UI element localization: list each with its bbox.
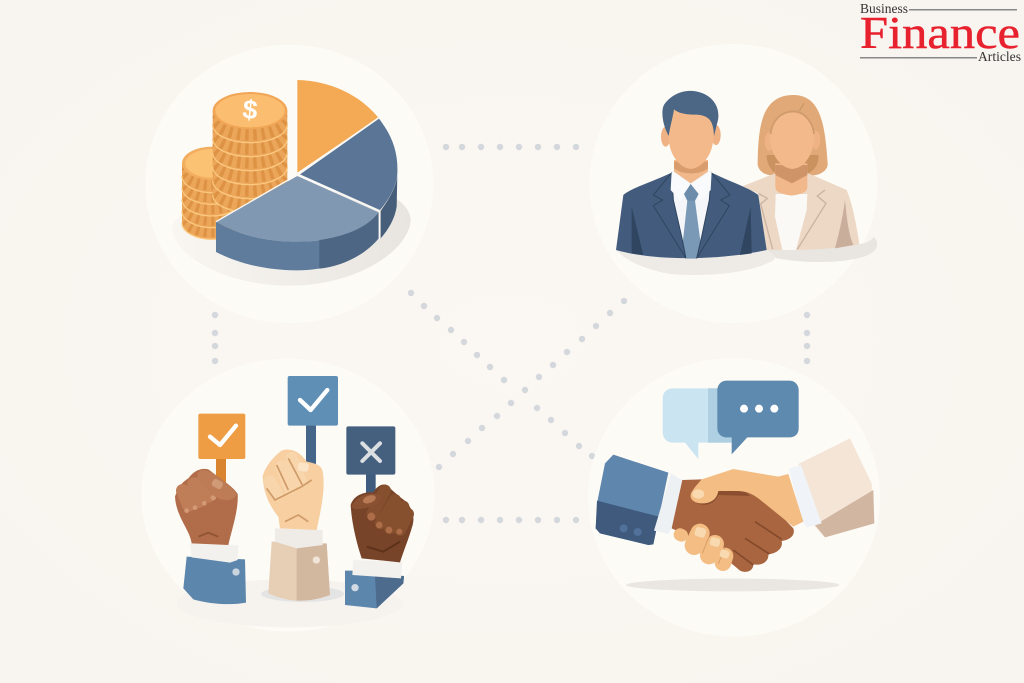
thumb nail	[692, 489, 704, 499]
board	[288, 376, 338, 426]
stick	[306, 423, 316, 467]
cuff	[352, 560, 402, 578]
infographic canvas	[175, 4, 1021, 608]
thumb nail	[211, 478, 224, 490]
pie shadow	[172, 187, 411, 286]
fingers	[270, 458, 301, 494]
finger nails	[694, 526, 730, 559]
right cuff	[789, 465, 822, 528]
board	[198, 414, 245, 459]
sleeve shade	[815, 490, 874, 537]
check mark	[300, 390, 327, 410]
right sleeve	[798, 438, 874, 537]
sleeve shade	[297, 543, 330, 601]
circle backdrop	[588, 358, 880, 637]
logo top rule	[909, 9, 1017, 10]
middle arm shadow	[261, 586, 344, 602]
pie side shade	[319, 212, 379, 269]
man right ear	[711, 125, 721, 145]
man tie	[683, 184, 701, 259]
button	[313, 556, 320, 564]
thumb	[352, 494, 381, 509]
logo word: Business: Business	[860, 2, 908, 17]
brown hand	[672, 479, 794, 572]
man shirt	[672, 172, 712, 258]
woman lapels	[758, 190, 826, 249]
panel: pie chart and coins	[145, 45, 433, 323]
woman	[742, 95, 859, 250]
woman sleeve shade	[835, 200, 853, 248]
stick	[216, 457, 226, 483]
panel: voting hands	[141, 358, 435, 632]
orange sign	[198, 414, 245, 483]
man shadow	[616, 250, 775, 275]
ground shadow	[177, 579, 403, 627]
finger gaps	[702, 537, 725, 564]
sleeve top	[596, 455, 668, 545]
man	[616, 91, 767, 259]
bubble body	[717, 381, 799, 454]
woman neck	[775, 163, 807, 196]
man tie knot	[684, 184, 699, 201]
typing dots	[740, 405, 778, 413]
dotted connectors	[212, 144, 810, 523]
check mark	[210, 426, 236, 445]
thumb	[197, 470, 237, 500]
board	[346, 426, 395, 475]
sleeve shade	[596, 501, 659, 545]
woman hairline	[771, 103, 814, 134]
woman face	[770, 113, 814, 169]
blue sign	[288, 376, 338, 467]
pie orange slice	[297, 80, 378, 173]
logo: Business Finance Articles	[860, 2, 1021, 64]
fingers	[372, 491, 408, 530]
thumb nail	[297, 462, 309, 472]
cuff	[190, 543, 238, 563]
tan fingers	[680, 533, 725, 563]
fingers	[183, 477, 208, 505]
thumb nail	[362, 494, 377, 505]
circle backdrop	[141, 358, 435, 632]
pie light slice	[216, 176, 379, 242]
cross mark	[362, 443, 380, 461]
panel: handshake	[588, 358, 880, 637]
woman shadow	[767, 237, 877, 262]
back coin stack	[182, 147, 242, 239]
man collar	[671, 172, 712, 202]
left sleeve	[596, 455, 668, 545]
woman top	[775, 194, 807, 250]
tan hand	[691, 469, 803, 527]
button	[351, 584, 359, 591]
sleeve top	[798, 438, 874, 537]
man face	[669, 107, 713, 169]
pie slice separators	[216, 118, 379, 239]
panel: business people	[589, 44, 877, 323]
woman inner hair	[767, 155, 818, 175]
cuff	[275, 528, 323, 548]
sleeve	[268, 542, 330, 601]
woman blazer	[742, 173, 859, 250]
stick	[366, 473, 376, 497]
dark sign	[346, 426, 395, 497]
woman neck shadow	[775, 165, 807, 183]
cuff buttons	[620, 524, 642, 536]
pie dark blue slice	[300, 119, 397, 210]
front coin stack	[213, 92, 287, 213]
circle backdrop	[145, 45, 433, 323]
sleeve shade	[375, 576, 404, 608]
finger creases	[267, 458, 312, 522]
man neck	[674, 160, 708, 183]
wrist crease	[198, 533, 218, 537]
man ears	[661, 127, 670, 147]
light speech bubble	[663, 388, 732, 459]
brown hand finger lines	[733, 522, 782, 565]
logo bottom rule	[860, 57, 977, 58]
pie dark slice side	[381, 175, 397, 238]
button	[232, 568, 240, 576]
left cuff	[654, 473, 682, 534]
palm crease	[367, 542, 400, 552]
man hair	[662, 91, 718, 136]
logo word: Finance: Finance	[860, 7, 1020, 58]
finger nails	[184, 495, 216, 513]
dollar sign: $	[241, 94, 259, 125]
left arm	[175, 469, 246, 604]
right arm	[345, 484, 413, 608]
fist palm	[175, 469, 238, 545]
sleeve	[183, 557, 246, 604]
logo word: Articles: Articles	[978, 49, 1021, 64]
man neck shadow	[674, 162, 708, 173]
fist palm	[351, 484, 413, 562]
woman right ear	[812, 131, 820, 149]
thumb shadow	[691, 490, 750, 505]
woman hair	[758, 95, 828, 176]
man jacket folds	[632, 207, 752, 255]
man lapels	[653, 173, 730, 258]
pie light slice side	[216, 212, 379, 270]
man jacket	[616, 173, 767, 258]
woman ears	[765, 132, 773, 151]
sleeve	[345, 571, 404, 608]
dark speech bubble	[717, 381, 799, 454]
fist palm	[263, 450, 324, 530]
knuckles	[367, 513, 402, 535]
ground shadow	[626, 579, 839, 591]
middle arm	[263, 450, 330, 601]
circle backdrop	[589, 44, 877, 323]
bubble overlap	[708, 388, 732, 443]
